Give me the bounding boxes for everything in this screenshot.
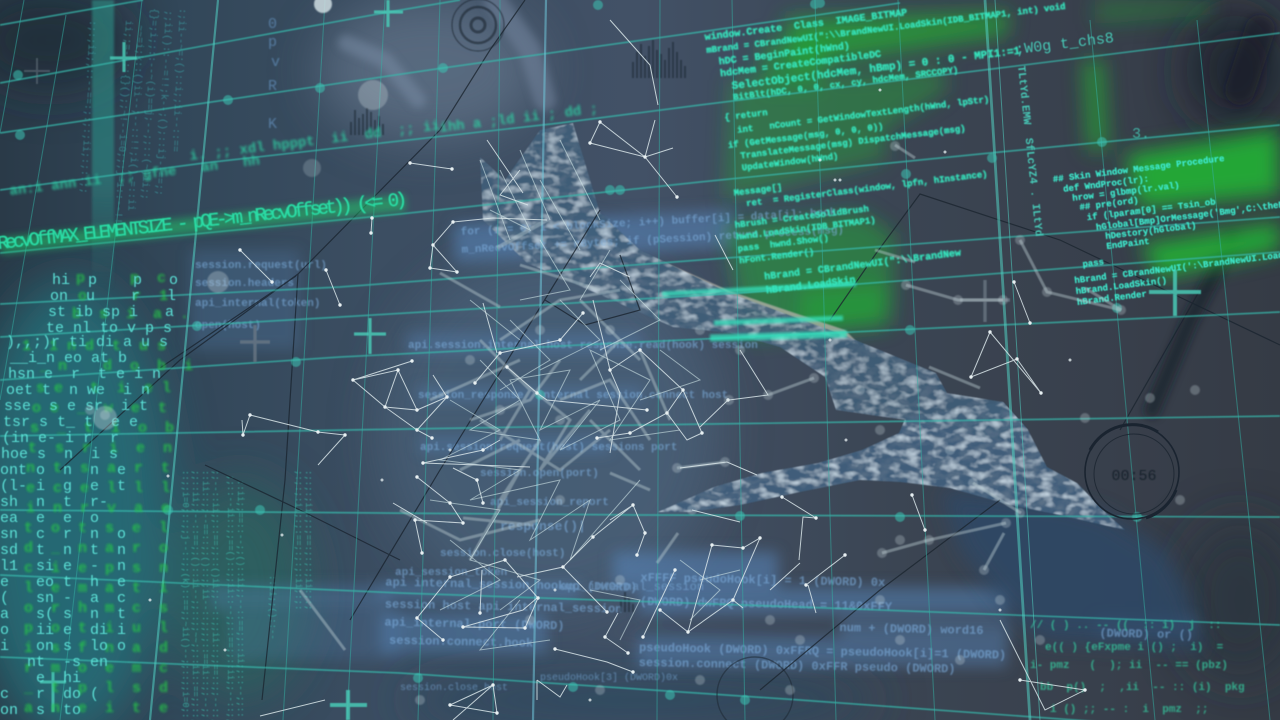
code block: upper centre: ret = RegisterClass(window, lpfn, hInstance) xyxy=(746,170,988,209)
particle network: crisp links xyxy=(240,20,1085,720)
blue code patches: pseudoHook (DWORD) 0xFFRQ = pseudoHook[i]=1 (DWORD) xyxy=(639,641,1006,663)
blue code patches: (DWORD) or () xyxy=(1099,626,1193,642)
column text: green letters: b s i a . xyxy=(72,306,189,323)
code heading: top right: ;W0g t_chs8 xyxy=(1015,30,1115,59)
code block: upper centre: hFont.Render() xyxy=(739,247,815,266)
code block: upper centre: hBrush = CreateSolidBrush xyxy=(734,204,869,231)
bright grid lines xyxy=(150,0,1040,720)
letters on hand column: K xyxy=(268,116,277,133)
code block: upper centre: int nCount = GetWindowTextLength(hWnd, lpStr) xyxy=(737,95,990,136)
blue code patches: api_internal.port (DWORD) xyxy=(384,615,565,633)
large faded circles xyxy=(93,0,388,430)
particle dots xyxy=(240,122,1085,713)
column text: green letters: i n r v a e xyxy=(26,500,170,517)
code heading: top right: TLtYd.EMW SfLcYZ4 . ILtYd xyxy=(1014,65,1044,237)
code block: upper centre: window.Create Class IMAGE_BITMAP xyxy=(704,7,908,44)
rocky arm: upper section and hand xyxy=(480,123,1028,440)
small dark bar charts xyxy=(350,40,686,612)
particle network: soft out-of-focus links xyxy=(300,145,1121,650)
code block: right: ## Skin Window Message Procedure xyxy=(1052,154,1225,185)
column text: green letters: r m o e m c xyxy=(24,660,168,677)
column text: teal letters: ),,;)r ti di a u s xyxy=(6,334,168,351)
letters on hand column: R xyxy=(268,78,277,95)
code block: right: hBrand.LoadSkin() xyxy=(1075,276,1168,297)
rocky arm: lower ridge xyxy=(658,402,1125,530)
blue code patches: (DWORD) dwFRQ pseudoHead = 11&0xFFY xyxy=(640,595,893,614)
code block: upper centre: { return xyxy=(724,108,768,123)
rocky arm: lower dim section xyxy=(940,490,1205,650)
column dots: top left: ii;;=--::{}();;~!--i=0;;;j=1::--!! xyxy=(111,20,134,224)
column dots: top left: :;ii--~=;()::i;;ii--::== xyxy=(168,8,188,152)
column text: green letters: i s f n a d xyxy=(24,640,168,657)
blue code patches: session.open(port) xyxy=(480,468,599,480)
blue code patches: api_session_report xyxy=(490,497,609,509)
small background dots xyxy=(150,90,1070,700)
blue code patches: m_nRecvOffset += nBytes; if (pSession) return process(msg) xyxy=(461,225,844,257)
faint cross markers xyxy=(24,58,1010,362)
column dots: top left xyxy=(77,8,188,224)
column text: teal letters: hi p p o xyxy=(52,272,178,289)
column text: teal letters: a s( s n t xyxy=(0,606,126,623)
code block: upper centre: BitBlt(hDC, 0, 0, cx, cy, hdcMem, SRCCOPY) xyxy=(733,65,959,103)
column text: green letters: s e t i e l xyxy=(36,380,171,397)
blue code patches: session.request(url) xyxy=(195,260,327,272)
code block: upper centre: Message[] xyxy=(733,183,783,199)
letters on hand column: 0 xyxy=(268,16,277,33)
column dots: bottom left grey-teal: :;:;:;ii:;:;==:;:;:;ii:;:; xyxy=(303,470,313,610)
column text: teal letters: hsn e r t e i n xyxy=(8,366,161,383)
blue code patches: num + (DWORD) word16 xyxy=(839,621,984,638)
column text: teal letters: ont o n n e xyxy=(0,462,126,479)
code block: upper centre: pass hwnd.Show() xyxy=(737,233,830,255)
column dots: top left: :;:;ii;;::--==:;:;:;ii;:;::;; xyxy=(77,20,98,194)
column text: teal letters: __i_n eo at b xyxy=(9,350,127,367)
column text: teal letters: st ib sp i a xyxy=(48,304,174,321)
blue code patches: api.session.request(host) sessions port xyxy=(420,442,677,454)
column text: green letters: p o t i u l xyxy=(24,620,168,637)
column text: teal letters: sh n t r- xyxy=(0,494,108,511)
column text: green letters: l e m a t i xyxy=(24,580,168,597)
column text: teal letters: ( sn - a c xyxy=(0,590,126,607)
blue code patches: open(host) xyxy=(195,320,261,332)
column text: teal letters: oet t n we i n xyxy=(6,382,150,399)
column text: green letters xyxy=(22,270,193,717)
code block: upper centre: hdcMem = CreateCompatibleDC xyxy=(720,49,882,80)
blue code patches: pseudoHook[3] (DWORD)0x xyxy=(540,672,678,684)
column text: green letters: s _ t i o b xyxy=(30,420,174,437)
column dots: bottom left grey-teal: ;;::ii;;--::==;;()::ii--;;::;;~~;;::ii::==;;::; xyxy=(190,470,200,720)
code block: right: pass xyxy=(1082,257,1105,270)
blue code patches: api internal_session hookup (DWORD) xyxy=(385,576,637,595)
green glow blobs xyxy=(725,0,1280,338)
code block: right: if (lparam[0] == Tsin_ob xyxy=(1086,197,1216,223)
column text: green letters: e c e l l l xyxy=(26,480,170,497)
column text: teal letters: (l- i g e t xyxy=(0,478,126,495)
blue code patches: session.close(host) xyxy=(440,548,565,560)
column text: teal letters: on s to xyxy=(0,702,81,719)
code block: right: hBrand = CBrandNewUI(':\BrandNewUI.Load xyxy=(1074,251,1280,286)
blue code patches: api_session_token xyxy=(395,567,507,579)
column text: green letters: d _ n a r o xyxy=(24,540,168,557)
blue code patches: session_response internal session.connect host xyxy=(418,390,728,402)
code block: right: ## pre(ord) xyxy=(1079,196,1139,213)
column text: green letters: 1 1 n d t u s xyxy=(22,338,166,355)
column dots: bottom left grey-teal: ;:;:;:ii;:;:==;:;:;:ii;:;: xyxy=(293,470,303,610)
code block: upper centre: mBrand = CBrandNewUI(":\\BrandNewUI.LoadSkin(IDB_BITMAP1, int) void xyxy=(706,2,1066,56)
column dots: bottom left grey-teal xyxy=(180,470,313,720)
code block: upper centre: hBrand.LoadSkin xyxy=(765,275,856,297)
glow behind bright code line xyxy=(0,203,405,246)
letters on hand column: p xyxy=(268,34,277,51)
column text: teal letters: nt -s en xyxy=(0,654,108,671)
column text: teal letters: te nl to v p s xyxy=(46,320,172,337)
faint code line above: an:i ann ii ;; gfne an hh xyxy=(9,153,261,200)
code block: right: EndPaint xyxy=(1106,237,1150,252)
code heading: top right xyxy=(1014,30,1150,237)
column text: teal letters: c r do ( xyxy=(0,686,99,703)
column text: teal letters: ea e e o xyxy=(0,510,99,527)
code block: bottom right: // ( ) .. -- (( :: i) j :: xyxy=(1030,620,1221,632)
code block: right: hDestory(hGlobal) xyxy=(1105,221,1197,242)
column text: green letters: o e _ w e t xyxy=(32,400,167,417)
code block: upper centre: SelectObject(hdcMem, hBmp) = 0 : 0 - MPI1:=1 xyxy=(731,46,1021,93)
column dots: top left: {}=;i;;::--~(i)==j;--;;::(~)ii;; xyxy=(138,8,160,200)
blue code patches: session.connect.hook xyxy=(389,634,533,651)
column text: teal letters: on u r l xyxy=(50,288,176,305)
column text: teal letters: (in e- i r r xyxy=(2,430,119,447)
column text: green letters: c i e p s n xyxy=(24,560,168,577)
column text: green letters: p p c xyxy=(76,270,166,287)
column text: green letters: _ n d o b i xyxy=(39,358,193,375)
blue code patches: session host api internal_session xyxy=(385,597,623,616)
teal smear lines over forearm xyxy=(662,284,856,338)
faint code line above: i. ;; xdl hpppt ii dd ;; ii xyxy=(189,118,441,165)
column text: teal letters: hoe s n i s xyxy=(1,446,118,463)
column text: green letters: n t s a r t xyxy=(26,460,170,477)
column text: teal letters: sn c r n o xyxy=(0,526,126,543)
code block: upper centre: hDC = BeginPaint(hWnd) xyxy=(718,40,851,68)
particle network: dense central links xyxy=(430,140,740,650)
faint code line above xyxy=(9,102,599,200)
code block: right xyxy=(1052,145,1280,309)
skin strip on forearm xyxy=(655,258,860,345)
column text: green letters: a n e i t e xyxy=(24,700,168,717)
code block: bottom right xyxy=(1030,620,1245,716)
dial: timer xyxy=(1085,425,1179,519)
blue code bands xyxy=(190,209,1195,667)
column dots: bottom left grey-teal: ::ii;;==::--;;()::ii;;--::==;;::ii;;::--;;:: xyxy=(235,480,245,718)
code block: upper centre: TranslateMessage(msg) DispatchMessage(msg) xyxy=(740,124,966,162)
column text: green letters: t o t s e l xyxy=(24,520,168,537)
column text: teal letters: e hi xyxy=(0,670,81,687)
blue code patches: response()| xyxy=(500,519,586,534)
letters on hand column xyxy=(268,16,280,133)
blue code patches: session.headers xyxy=(195,278,294,290)
code block: upper centre: hwnd.LoadSkin(IDB_BITMAP1) xyxy=(736,216,876,243)
blue code patches: for (i = 0; i < blockSize; i++) buffer[i] = data[i]; hook xyxy=(460,207,837,239)
column text: green letters: o r h m c s xyxy=(24,600,168,617)
blue code patches: api_internal_session xyxy=(560,580,704,594)
code line: bright diagonal: RecvOffMAX_ELEMENTSIZE - pQE->m_nRecvOffset)) (<= 0) xyxy=(0,189,408,255)
column text: green letters: t s r i e n xyxy=(28,440,172,457)
column dots: top left: ~~=i;k::()ii--;--::!!;i()-=::ii xyxy=(124,25,146,211)
faint code line above: ihh a ;ld ii ; dd ; xyxy=(439,102,599,137)
dial reading: 00:56 xyxy=(1111,468,1157,485)
code heading: top right: 3. xyxy=(1132,126,1150,143)
column text: teal letters xyxy=(0,272,178,719)
blue code patches: session.connect (DWORD) 0xFFR pseudo (DWORD) xyxy=(639,656,956,676)
column text: teal letters: sd t n t n xyxy=(0,542,126,559)
blue code patches xyxy=(195,207,1194,694)
code block: right: def WndProc(lr): xyxy=(1063,174,1150,195)
column text: green letters: o r 1 xyxy=(78,288,168,305)
soft glow nodes xyxy=(90,146,1195,700)
column text: green letters: _ t p l s d xyxy=(23,680,168,697)
blue code patches: api.session.internal.host response.read(hook) session xyxy=(408,340,758,352)
column dots: top left: ;;ii()::--=!!;k--;();::ij--==;; xyxy=(152,10,174,196)
column text: teal letters: tsr s t_ t e e xyxy=(3,414,138,431)
column text: teal letters: o ii e di i xyxy=(0,622,126,639)
dial: top rings xyxy=(452,0,504,51)
code block: upper centre: UpdateWindow(hWnd) xyxy=(741,152,839,173)
code block: bottom right: bb p() ; ,ii -- :: (i) pkg xyxy=(1040,682,1245,694)
blue code patches: xFFFF pseudoHook[i] = 1 (DWORD) 0x xyxy=(640,571,885,590)
dial: bottom ring xyxy=(717,657,793,720)
code block: bottom right: i- pmz ( ); ii -- == (pbz) xyxy=(1030,660,1228,672)
code block: upper centre: if (GetMessage(msg, 0, 0, 0)) xyxy=(727,122,884,151)
code block: right: hBrand.Render xyxy=(1077,289,1147,308)
column text: teal letters: l1 si e - n xyxy=(0,558,126,575)
code block: upper centre xyxy=(704,0,1096,301)
photo: hand silhouette highlights xyxy=(346,0,1260,410)
column text: teal letters: i on s lo o xyxy=(0,638,126,655)
blue code patches: session.close host xyxy=(400,682,508,694)
code block: right: hrow = glbmp(lr.val) xyxy=(1072,181,1180,204)
column text: teal letters: e eo t h e xyxy=(0,574,126,591)
code block: bottom right: e(( ) {eFxpme i () ; i) = xyxy=(1045,642,1224,654)
column dots: bottom left grey-teal: ::ii;;()::-- xyxy=(267,575,277,640)
letters on hand column: v xyxy=(271,54,280,71)
code block: upper centre: hBrand = CBrandNewUI(":\\BrandNew xyxy=(764,247,962,283)
blue code patches: api_internal(token) xyxy=(195,298,320,310)
column text: teal letters: sse s e sr i t xyxy=(4,398,148,415)
code block: bottom right: i () ;; -- : i pmz ;; xyxy=(1050,704,1208,716)
teal band top left xyxy=(92,0,114,290)
